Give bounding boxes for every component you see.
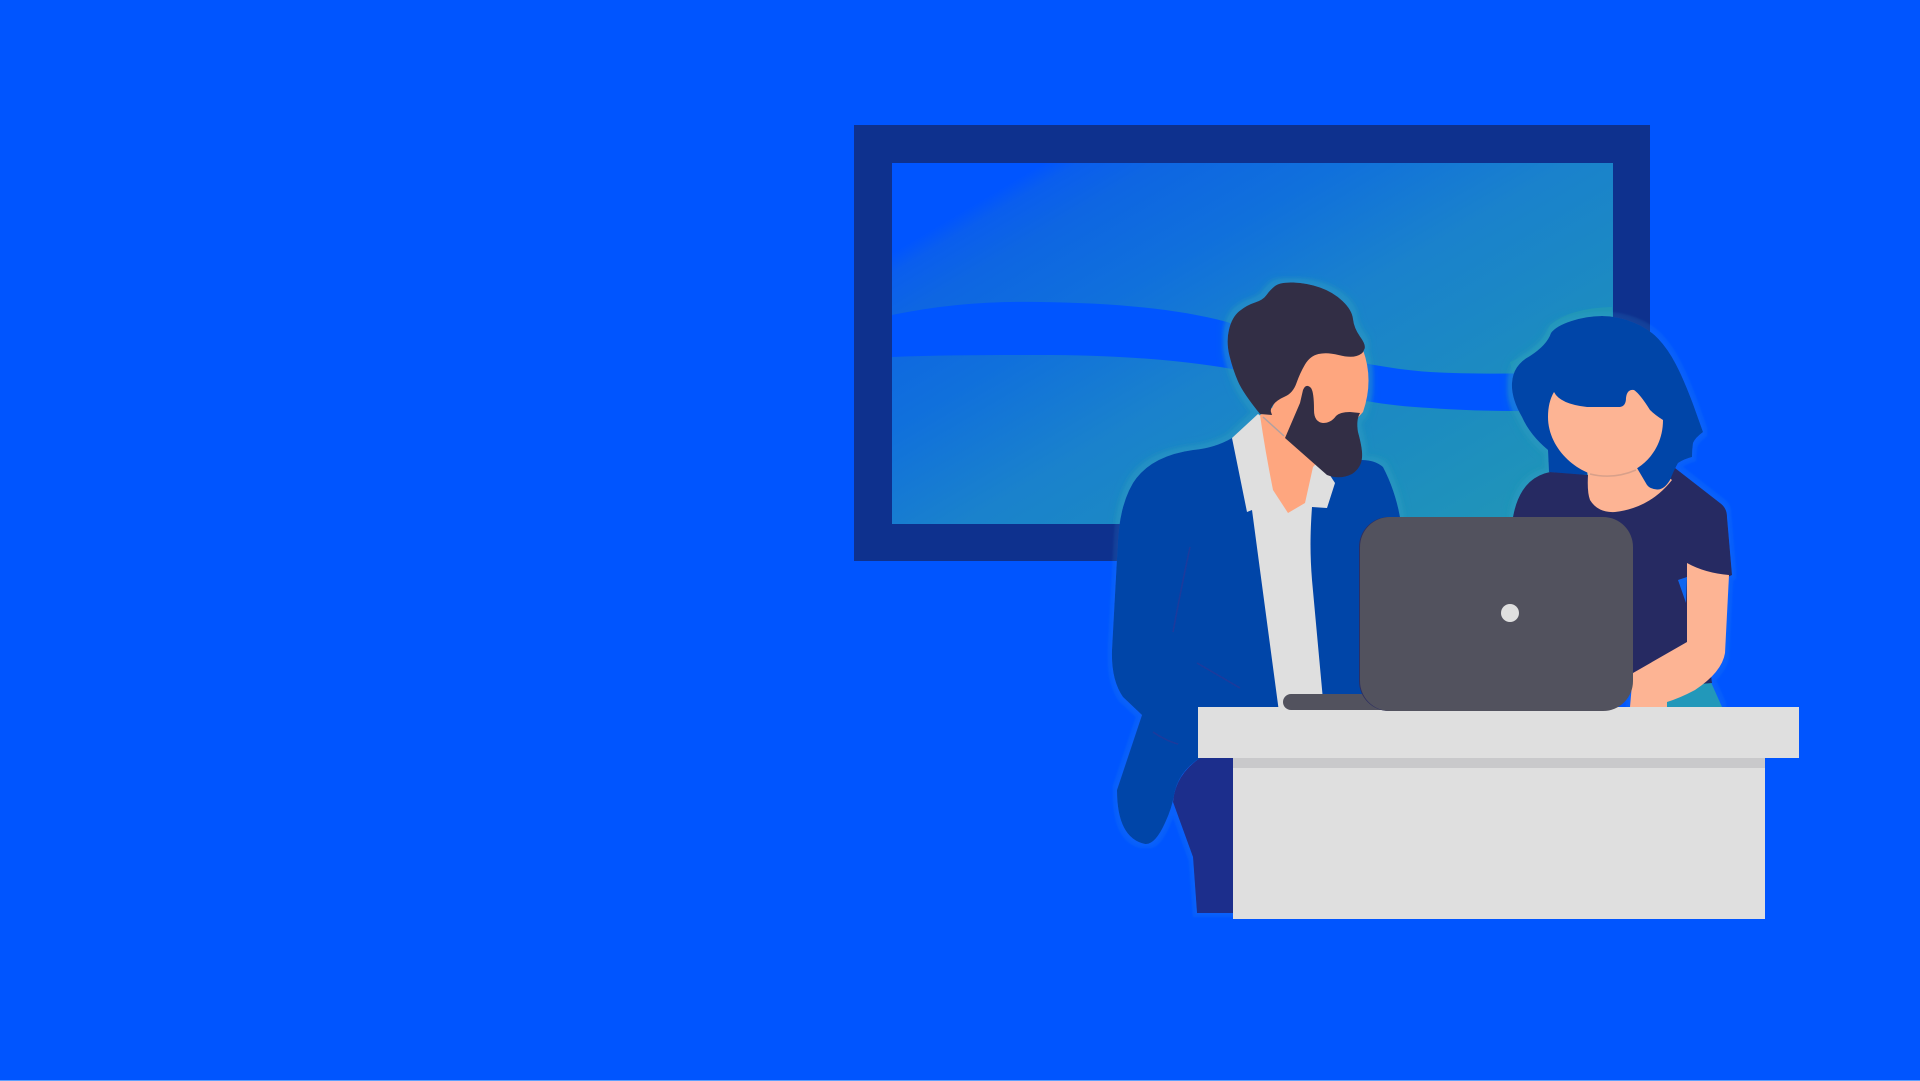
desk shadow strip <box>1233 758 1765 768</box>
man jacket <box>1112 430 1400 844</box>
bottom edge line <box>0 1080 1920 1081</box>
man trousers <box>1173 758 1233 913</box>
woman hair <box>1512 316 1703 490</box>
teal glow behind figures on screen <box>1221 278 1519 411</box>
jacket fold lines <box>1153 547 1240 744</box>
screen wave band <box>892 302 1613 411</box>
man face and neck <box>1260 350 1368 513</box>
man neck line <box>1263 417 1284 436</box>
man <box>1112 282 1400 913</box>
desk <box>1198 707 1799 919</box>
desk leg panel <box>1233 758 1765 919</box>
laptop logo dot <box>1501 604 1519 622</box>
teal glow at woman's hair <box>1510 307 1612 372</box>
woman t-shirt <box>1513 468 1732 690</box>
laptop <box>1283 517 1633 711</box>
desk top <box>1198 707 1799 758</box>
laptop lid <box>1360 517 1633 711</box>
woman skirt <box>1667 680 1722 707</box>
screen gradient panel <box>892 163 1613 524</box>
woman gap under arm <box>1678 577 1687 603</box>
laptop base <box>1283 694 1393 710</box>
woman neck <box>1585 455 1672 512</box>
man hair <box>1228 282 1365 415</box>
laptop left edge shadow <box>1359 517 1459 711</box>
man beard <box>1285 386 1362 477</box>
screen frame <box>854 125 1650 561</box>
woman <box>1512 316 1732 707</box>
woman necklace <box>1590 470 1636 476</box>
wall screen <box>854 125 1650 561</box>
man shirt <box>1232 414 1335 712</box>
woman arm <box>1630 563 1729 707</box>
woman face <box>1548 390 1663 477</box>
